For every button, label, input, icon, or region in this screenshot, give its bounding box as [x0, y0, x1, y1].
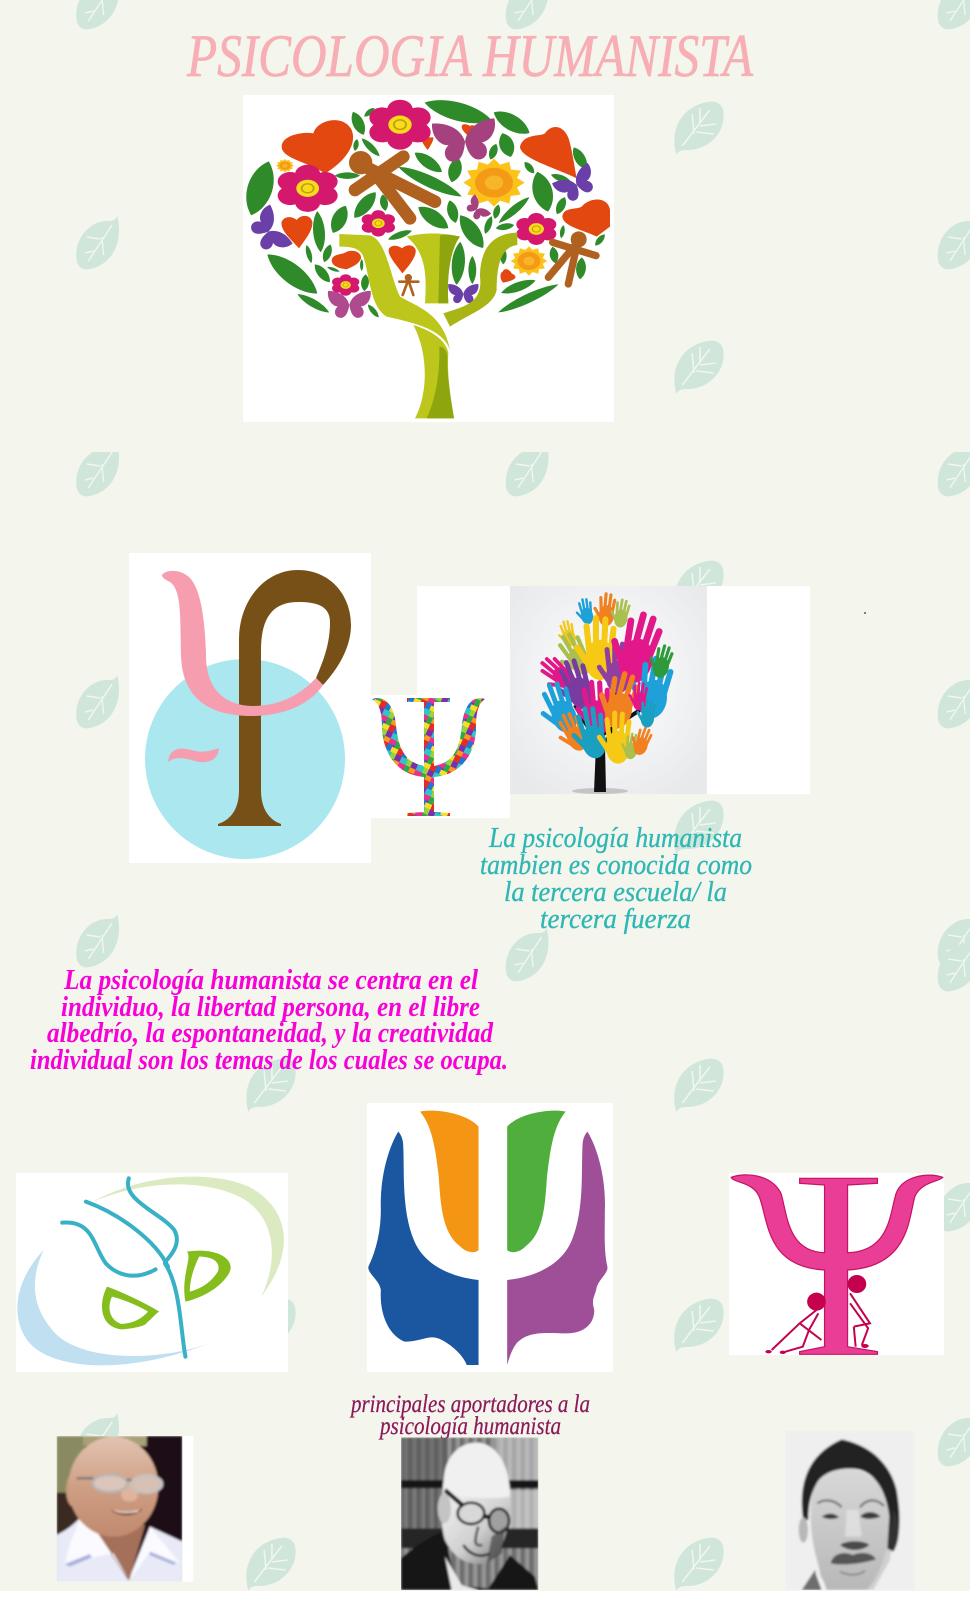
ground shadow [572, 788, 628, 794]
title: PSICOLOGIA HUMANISTA [186, 23, 753, 89]
tree butterflies [245, 118, 601, 318]
tree hearts [281, 120, 610, 283]
image: hands tree [417, 586, 810, 794]
blue circle [145, 659, 345, 859]
image: pink psi with figures [729, 1173, 944, 1355]
photo: man with dark hair and mustache [796, 1438, 902, 1590]
text: tercera escuela [480, 823, 752, 935]
tree leaves [239, 94, 607, 319]
hands [535, 593, 674, 764]
text: tercera escuela: tambien es conocida como [480, 850, 752, 881]
text: definition: individual son los temas de los cuales se ocupa. [30, 1045, 508, 1076]
image: psi tree of life [239, 94, 614, 422]
pink psi [731, 1175, 943, 1354]
tree suns [276, 159, 547, 276]
image: head profiles psi logo [367, 1103, 613, 1372]
tree flowers [278, 100, 556, 296]
brown psi stem [218, 570, 351, 826]
text: tercera escuela: La psicología humanista [488, 823, 742, 854]
photo: bald man in suit with books [401, 1437, 538, 1590]
pink tilde [168, 748, 219, 762]
text: tercera escuela: la tercera escuela/ la [504, 877, 727, 908]
tiny dot [864, 612, 866, 614]
text: definition: La psicología humanista se centra en el [63, 965, 478, 996]
lime leaves [184, 1251, 231, 1302]
photo: man with glasses and white shirt [57, 1436, 193, 1582]
teal stems [62, 1178, 185, 1357]
text: definition: albedrío, la espontaneidad, y la creatividad [47, 1018, 494, 1049]
tree people [351, 153, 596, 295]
blue face [368, 1132, 479, 1365]
text: principales aportadores [349, 1391, 590, 1440]
orange arm [420, 1111, 479, 1252]
purple face [507, 1132, 607, 1365]
tree trunk psi [339, 233, 517, 418]
text: definition [30, 965, 508, 1076]
image: mosaic psi [371, 695, 510, 818]
seated figures [772, 1293, 870, 1352]
pink psi arc [162, 571, 323, 716]
green arm [507, 1111, 566, 1252]
text: principales aportadores: psicología humanista [378, 1413, 561, 1440]
text: tercera escuela: tercera fuerza [540, 904, 691, 935]
blue swoosh [17, 1250, 218, 1365]
green swoosh [93, 1177, 284, 1297]
text: definition: individuo, la libertad persona, en el libre [61, 992, 480, 1023]
image: pink and brown psi on blue circle [129, 553, 371, 863]
text: principales aportadores: principales aportadores a la [349, 1391, 590, 1418]
image: teal plant logo [16, 1173, 288, 1372]
trunk [575, 690, 640, 792]
